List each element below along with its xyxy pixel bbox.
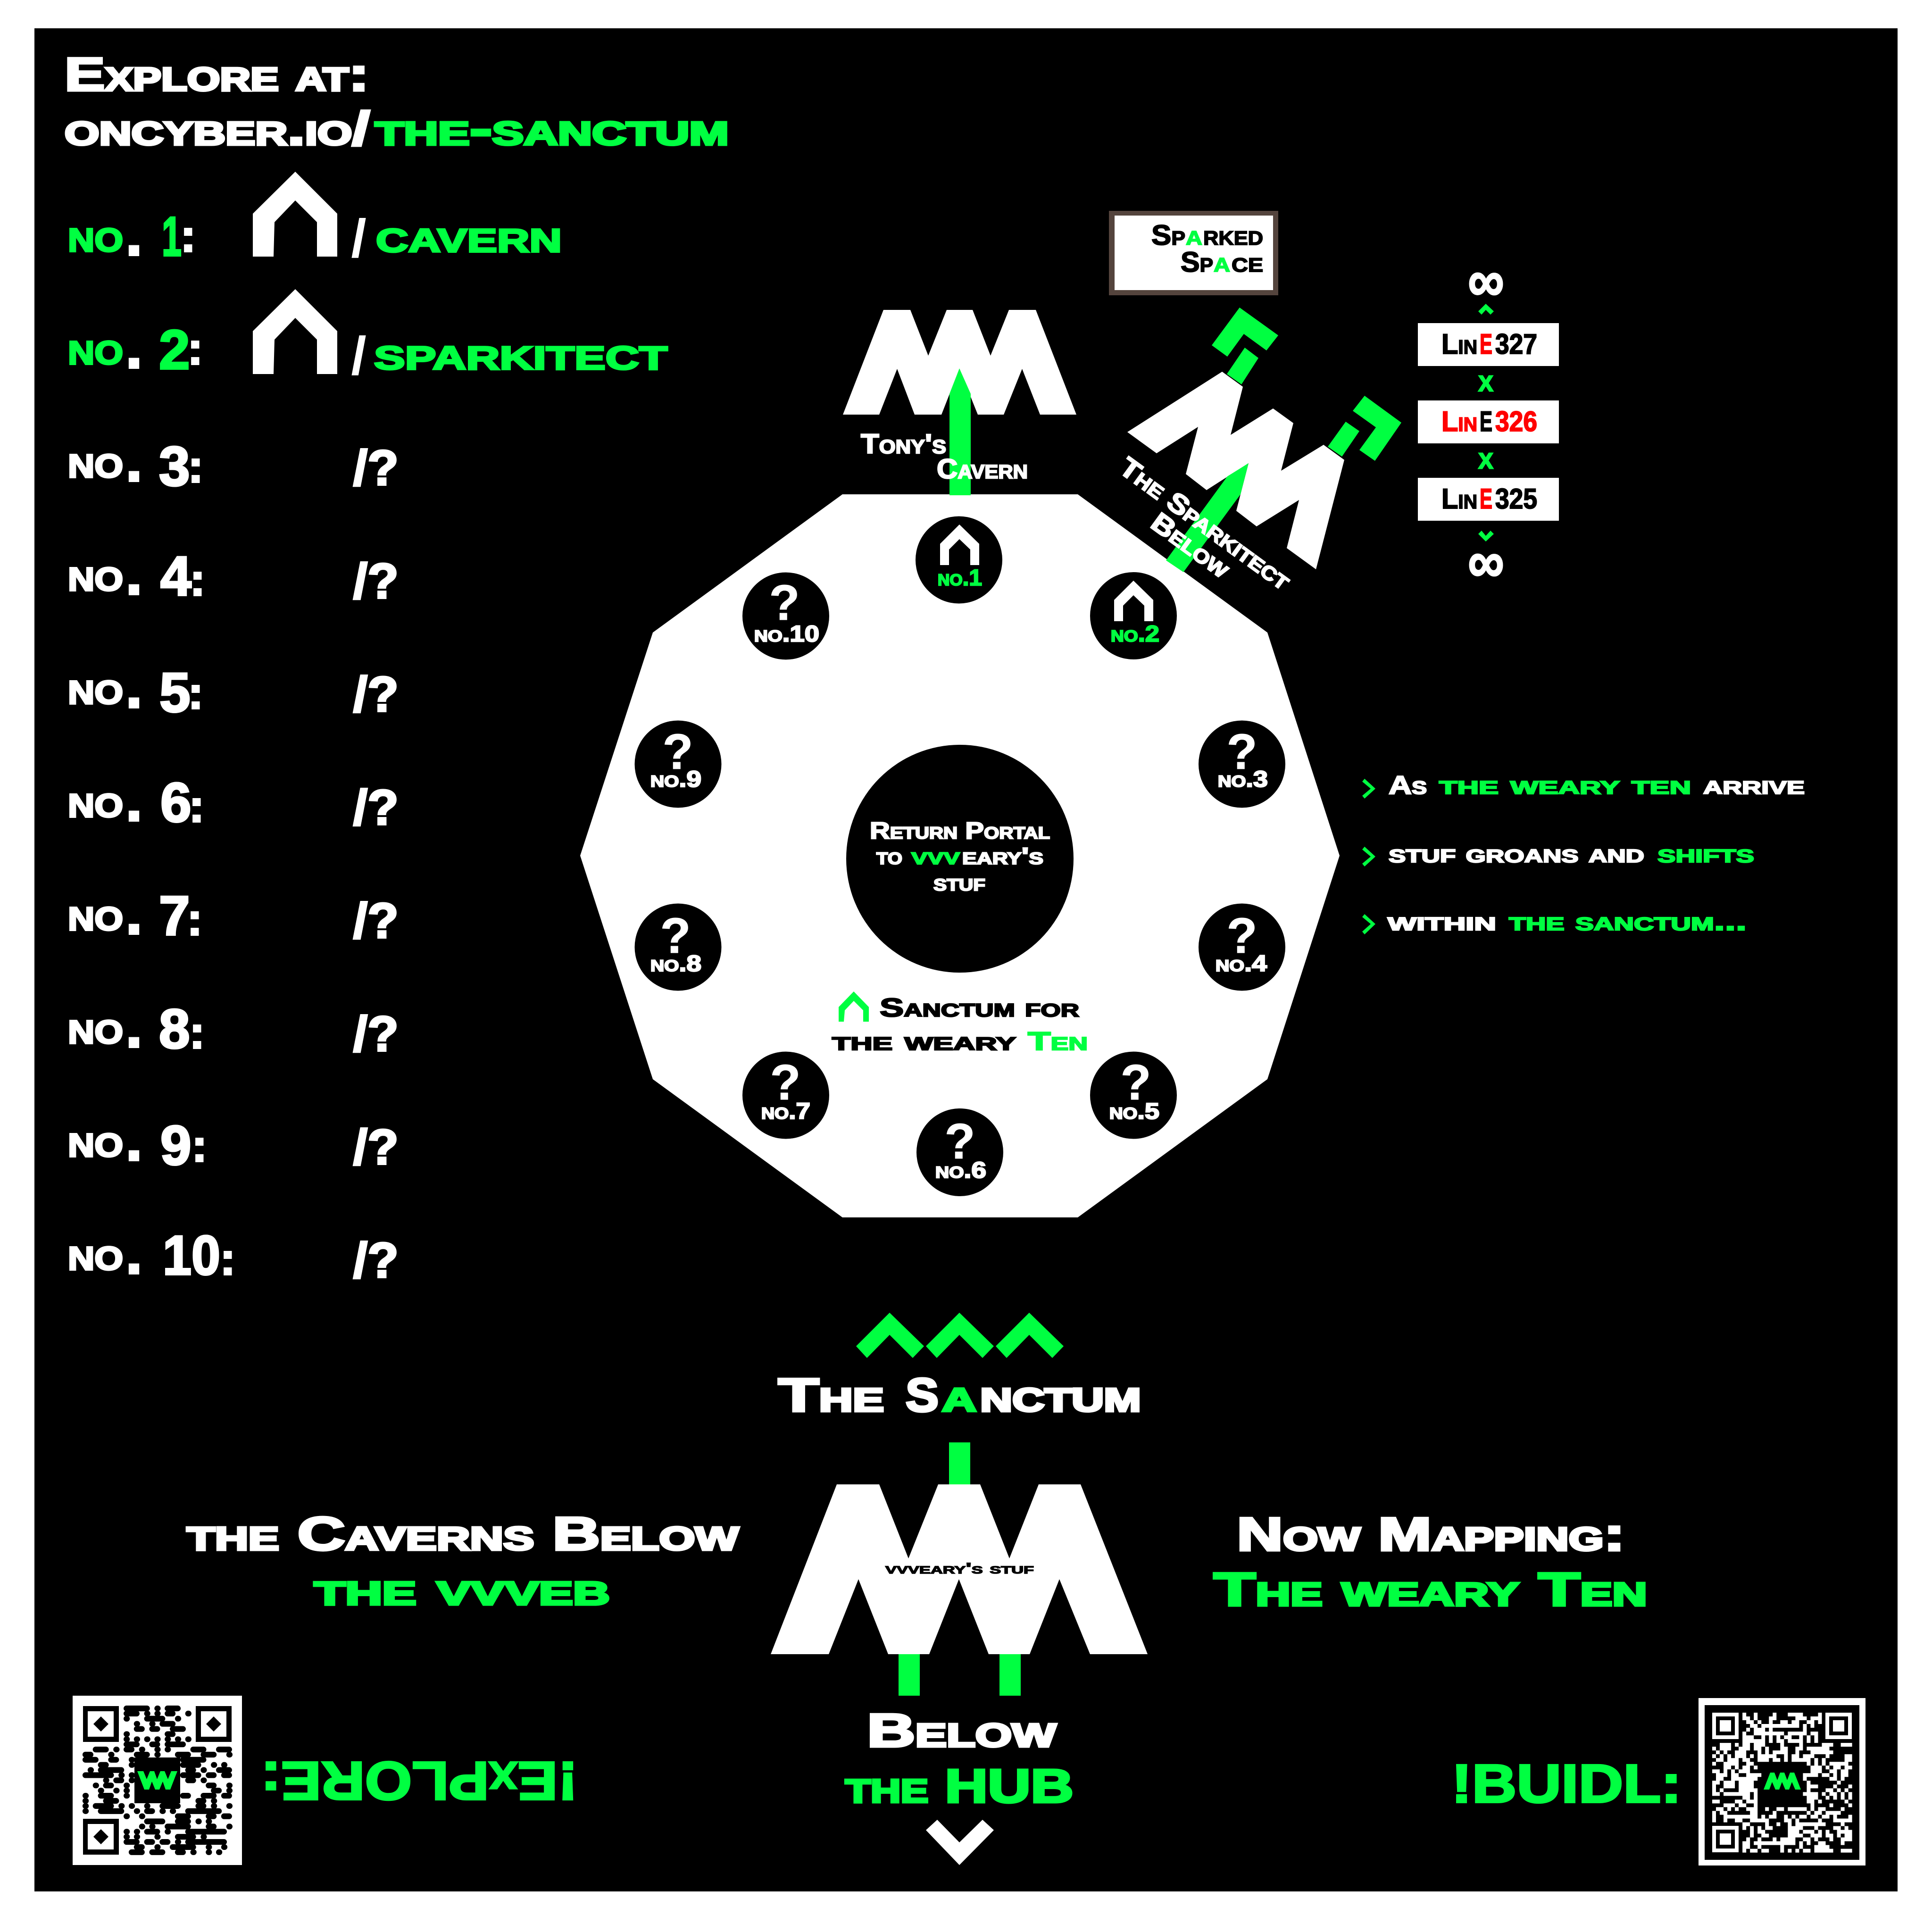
row no. 1: . [125, 200, 142, 268]
sanctum for the weary ten label: Ten [1028, 1026, 1088, 1056]
row no. 7: 7 [159, 885, 190, 947]
portal no.10: ? [769, 575, 799, 631]
row no. 8: 8 [159, 998, 190, 1060]
sparked space box: a [1214, 246, 1230, 278]
row no. 5: : [188, 668, 203, 718]
triple green chevrons [856, 1313, 1064, 1358]
row no. 1: : [181, 211, 196, 261]
line 325 box [1418, 478, 1559, 521]
green connectors around main mountain [899, 1442, 1021, 1696]
qr centre logo [1764, 1773, 1801, 1790]
row no. 8: : [190, 1008, 205, 1058]
row no. 9: no [68, 1114, 123, 1167]
sparkitect mountain icon [1127, 372, 1344, 569]
row no. 10 [68, 1218, 399, 1288]
sanctum for the weary ten label: Sanctum for [880, 993, 1079, 1022]
bullet line 1: the weary ten [1439, 770, 1691, 799]
row no. 7: : [187, 895, 202, 945]
line 327 box: 327 [1495, 328, 1537, 360]
heading: explore at: Explore at: [65, 48, 369, 101]
portal no.7: ? [770, 1055, 800, 1110]
data modules [1712, 1715, 1852, 1851]
row no. 6: /? [353, 780, 399, 835]
portal no.3 [1199, 721, 1285, 808]
qr centre logo [134, 1757, 180, 1803]
portal no.7 [742, 1052, 829, 1139]
tony's cavern mountain icon [843, 310, 1076, 415]
row no. 1: / [351, 209, 366, 268]
row no. 9: . [125, 1105, 142, 1174]
portal no.4: no.4 [1216, 951, 1267, 976]
row no. 4: : [190, 555, 205, 605]
the caverns below heading [187, 1507, 739, 1615]
bullet line 3 [1362, 907, 1747, 936]
chevron up [1478, 304, 1494, 315]
heading: explore at: oncyber.io/ [65, 102, 370, 155]
row no. 9: 9 [160, 1115, 192, 1177]
line 325 box: E [1480, 483, 1492, 515]
the sanctum title: nctum [980, 1369, 1141, 1422]
portal no.3: no.3 [1218, 767, 1268, 792]
vvveary's stuf label: vvveary's stuf [885, 1560, 1034, 1577]
row no. 6: 6 [160, 772, 192, 834]
row no. 10: 10 [163, 1224, 220, 1287]
row no. 2: no [68, 322, 123, 375]
icon: green house [839, 991, 869, 1022]
sanctum for the weary ten label: the weary [832, 1026, 1016, 1056]
row no. 8: . [125, 991, 142, 1060]
line 327 box: Lin [1441, 328, 1477, 360]
sparked space box [1109, 211, 1278, 295]
portal no.1 [916, 516, 1002, 604]
portal no.2: no.2 [1111, 622, 1159, 647]
centre return portal: vvv [911, 843, 960, 869]
portal no.9: no.9 [650, 767, 701, 792]
portal no.8: no.8 [650, 951, 701, 976]
finder patterns [83, 1706, 232, 1855]
now mapping heading: Now Mapping: [1237, 1508, 1625, 1561]
line 325 box: Lin [1441, 483, 1477, 515]
below the hub label: Below [867, 1704, 1056, 1757]
row no. 8: no [68, 1001, 123, 1054]
row no. 4 [68, 539, 399, 609]
bullet list narrative [1362, 770, 1805, 936]
the sanctum title [778, 1369, 1141, 1422]
chevron down [1478, 531, 1494, 541]
row no. 5: . [125, 652, 142, 721]
mirrored explore call to action: !ExPLORE: [261, 1750, 578, 1811]
line 325 box: 325 [1495, 483, 1537, 515]
row no. 3: 3 [159, 435, 190, 498]
row no. 6: no [68, 774, 123, 827]
row no. 9: : [192, 1121, 207, 1171]
the sanctum title: a [942, 1369, 976, 1422]
the sanctum title: The [778, 1369, 884, 1422]
bullet line 1: As [1389, 770, 1427, 799]
portal no.6: no.6 [935, 1158, 986, 1183]
bullet line 2 [1362, 839, 1754, 868]
data modules [85, 1708, 230, 1852]
row no. 2: sparkitect [374, 327, 667, 380]
green arrow to sparkitect [1166, 463, 1249, 572]
now mapping heading [1214, 1508, 1647, 1616]
line 327 box: E [1480, 328, 1492, 360]
portal no.8: ? [660, 908, 691, 964]
portal no.9 [635, 721, 722, 808]
sparkitect label: The Sparkitect [1114, 451, 1297, 596]
row no. 1: 1 [162, 206, 182, 268]
line series [1418, 248, 1559, 595]
the caverns below heading: the Caverns Below [187, 1507, 739, 1560]
row no. 1: no [68, 209, 123, 262]
row no. 3: . [125, 425, 142, 494]
finder patterns [1714, 1715, 1850, 1850]
row no. 4: /? [353, 554, 399, 609]
row no. 5: /? [353, 667, 399, 722]
bullet line 1: arrive [1703, 770, 1805, 799]
row no. 5: no [68, 661, 123, 714]
infinity bottom: ∞ [1468, 529, 1504, 595]
the caverns below heading: the vvveb [314, 1562, 610, 1615]
row no. 10: . [125, 1218, 142, 1287]
row no. 2: : [188, 324, 203, 374]
portal no.3: ? [1227, 724, 1257, 780]
qr code: explore [73, 1696, 242, 1865]
list of ten spaces [68, 172, 667, 1288]
portal no.5: no.5 [1109, 1099, 1159, 1124]
row no. 3: /? [353, 441, 399, 496]
bullet line 2: stuf groans and [1389, 839, 1644, 868]
centre return portal: to [876, 843, 902, 869]
portal no.9: ? [663, 724, 693, 780]
the sanctum title: S [906, 1369, 939, 1422]
row no. 9 [68, 1105, 399, 1177]
sparked space box: a [1186, 219, 1202, 251]
portal no.10 [742, 573, 829, 659]
portal no.5 [1090, 1052, 1177, 1139]
row no. 6: . [125, 765, 142, 834]
arrow: to line series [1328, 396, 1401, 461]
heading: explore at [65, 48, 729, 155]
finder centres [1720, 1720, 1844, 1845]
centre return portal: eary's [962, 843, 1043, 869]
row no. 4: 4 [160, 545, 192, 608]
portal no.2 [1090, 572, 1177, 659]
row no. 5: 5 [159, 662, 191, 724]
tony's cavern label [861, 429, 1028, 484]
centre return portal [846, 745, 1074, 973]
portal no.6: ? [945, 1114, 975, 1169]
row no. 8: /? [353, 1007, 399, 1062]
down chevron [926, 1820, 994, 1865]
portal no.1: no.1 [938, 566, 982, 591]
sparkitect label: Below [1145, 507, 1236, 584]
heading: explore at: the-sanctum [375, 102, 729, 155]
row no. 10: /? [353, 1233, 399, 1288]
row no. 2: . [125, 312, 142, 381]
centre return portal: stuf [933, 869, 985, 896]
row no. 6 [68, 765, 399, 835]
row no. 2: / [351, 326, 366, 385]
row no. 10: : [220, 1234, 235, 1284]
row no. 7: /? [353, 893, 399, 949]
infinity top: ∞ [1468, 248, 1504, 314]
line 326 box: Lin [1441, 406, 1477, 437]
sanctum for the weary ten label [832, 991, 1088, 1056]
decagon: sanctum map [580, 494, 1340, 1217]
bullet line 3: within [1388, 907, 1496, 936]
sparked space box: ce [1232, 246, 1263, 278]
below the hub label: the HUB [845, 1760, 1074, 1813]
line 326 box: 326 [1495, 406, 1537, 437]
portal no.5: ? [1121, 1055, 1151, 1110]
centre return portal: Return Portal [870, 817, 1050, 844]
row no. 5 [68, 652, 399, 724]
portal no.10: no.10 [754, 622, 819, 647]
row no. 7: no [68, 888, 123, 941]
sparked space box: rked [1203, 219, 1263, 251]
green arrow to tony's cavern [949, 368, 971, 495]
below the hub label [845, 1704, 1074, 1813]
bullet line 3: the sanctum... [1509, 907, 1747, 936]
sparked space box: Sp [1181, 246, 1213, 278]
row no. 3: : [188, 442, 203, 492]
separator x: X [1479, 449, 1493, 473]
row no. 7: . [125, 878, 142, 947]
line 326 box [1418, 400, 1559, 443]
row no. 8 [68, 991, 399, 1062]
row no. 6: : [189, 782, 204, 832]
row no. 1: cavern [376, 209, 562, 262]
qr code: buidl [1699, 1698, 1865, 1865]
row no. 1 [68, 172, 562, 268]
row no. 3: no [68, 435, 123, 488]
bullet line 2: shifts [1657, 839, 1754, 868]
line 327 box [1418, 323, 1559, 366]
main mountain icon [771, 1484, 1148, 1654]
bullet line 1 [1362, 770, 1805, 799]
row no. 10: no [68, 1227, 123, 1280]
row no. 9: /? [353, 1120, 399, 1175]
row no. 3 [68, 425, 399, 498]
now mapping heading: The weary Ten [1214, 1563, 1647, 1616]
line 326 box: E [1480, 406, 1492, 437]
tony's cavern label: Tony's [861, 429, 946, 459]
tony's cavern label: Cavern [937, 454, 1028, 484]
portal no.7: no.7 [761, 1099, 810, 1124]
buidl call to action: !BUIDL: [1451, 1754, 1682, 1814]
arrow: to sparked space [1212, 308, 1278, 384]
row no. 4: no [68, 548, 123, 601]
portal no.8 [635, 904, 722, 991]
row no. 4: . [125, 539, 142, 608]
sparked space box: Sp [1151, 219, 1185, 251]
separator x: X [1479, 371, 1493, 396]
portal no.4 [1199, 904, 1285, 991]
row no. 2 [68, 289, 667, 385]
portal no.6 [916, 1108, 1003, 1196]
portal no.4: ? [1227, 908, 1257, 964]
row no. 2: 2 [159, 319, 190, 381]
row no. 7 [68, 878, 399, 949]
